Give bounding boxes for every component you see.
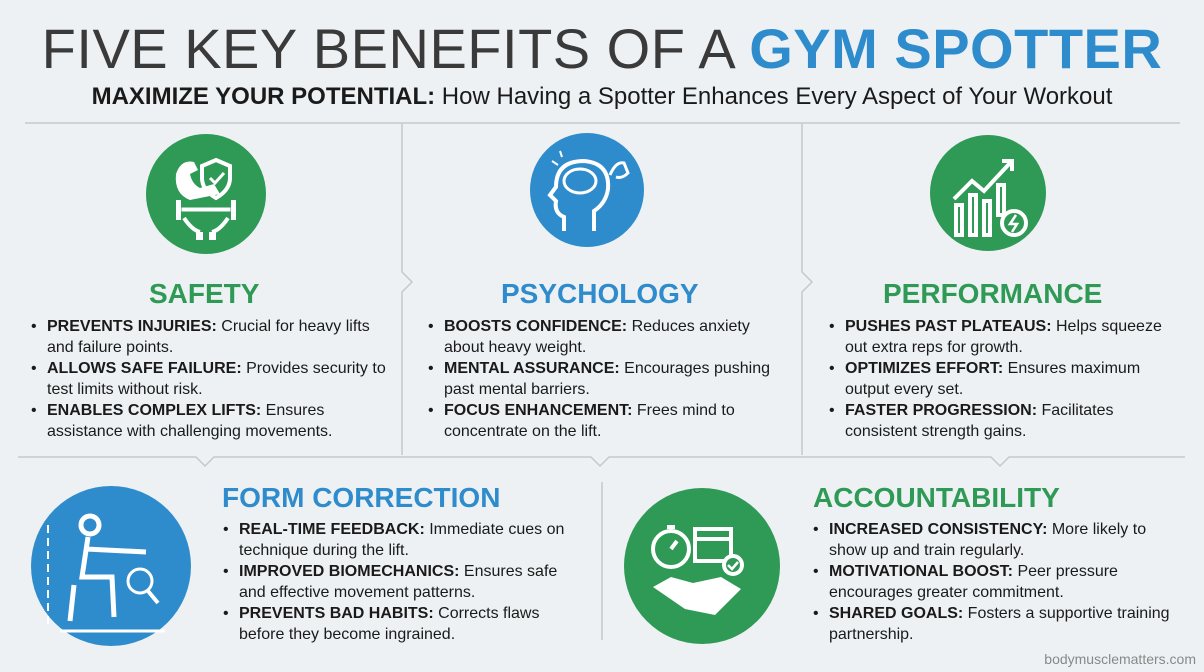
bullets: form correction: PREVENTS BAD HABITS: Corrects flaws before they become ingrained. [239, 605, 539, 643]
bullets: accountability: SHARED GOALS: Fosters a supportive training partnership. [829, 605, 1170, 643]
bullets: form correction [224, 521, 564, 643]
icon: performance [930, 135, 1046, 251]
panel: form correction [31, 482, 564, 646]
icon: safety [146, 134, 266, 254]
bullets: psychology: MENTAL ASSURANCE: Encourages pushing past mental barriers. [444, 360, 770, 398]
subtitle: MAXIMIZE YOUR POTENTIAL: How Having a Spotter Enhances Every Aspect of Your Workout [92, 83, 1112, 110]
heading: performance: PERFORMANCE [883, 278, 1102, 309]
heading: accountability: ACCOUNTABILITY [813, 482, 1060, 513]
bullets: safety [32, 318, 386, 440]
bullets: form correction: IMPROVED BIOMECHANICS: Ensures safe and effective movement patterns. [239, 563, 557, 601]
icon: accountability [624, 488, 780, 644]
bullets: psychology: BOOSTS CONFIDENCE: Reduces anxiety about heavy weight. [444, 318, 750, 356]
bullets: performance: OPTIMIZES EFFORT: Ensures maximum output every set. [845, 360, 1140, 398]
bullets: accountability [814, 521, 1170, 643]
icon: form correction [31, 486, 191, 646]
bullets: safety: ALLOWS SAFE FAILURE: Provides security to test limits without risk. [47, 360, 386, 398]
heading: safety: SAFETY [149, 278, 259, 309]
panel: performance [830, 135, 1162, 440]
bullets: accountability: INCREASED CONSISTENCY: More likely to show up and train regularly. [829, 521, 1146, 559]
title: FIVE KEY BENEFITS OF A GYM SPOTTER [42, 17, 1162, 80]
bullets: psychology [428, 318, 770, 440]
bullets: performance: FASTER PROGRESSION: Facilitates consistent strength gains. [845, 402, 1114, 440]
panel: safety [32, 134, 386, 440]
icon: psychology [530, 133, 644, 247]
bullets: performance [830, 318, 1162, 440]
heading: form correction: FORM CORRECTION [222, 482, 500, 513]
bullets: safety: PREVENTS INJURIES: Crucial for heavy lifts and failure points. [47, 318, 370, 356]
heading: psychology: PSYCHOLOGY [501, 278, 699, 309]
bullets: performance: PUSHES PAST PLATEAUS: Helps squeeze out extra reps for growth. [845, 318, 1162, 356]
footer credit: bodymusclematters.com [1044, 651, 1196, 667]
bullets: safety: ENABLES COMPLEX LIFTS: Ensures assistance with challenging movements. [47, 402, 332, 440]
bullets: form correction: REAL-TIME FEEDBACK: Immediate cues on technique during the lift. [239, 521, 564, 559]
panel: psychology [428, 133, 770, 440]
bullets: psychology: FOCUS ENHANCEMENT: Frees mind to concentrate on the lift. [444, 402, 735, 440]
bullets: accountability: MOTIVATIONAL BOOST: Peer pressure encourages greater commitment. [829, 563, 1118, 601]
panel: accountability [624, 482, 1170, 644]
